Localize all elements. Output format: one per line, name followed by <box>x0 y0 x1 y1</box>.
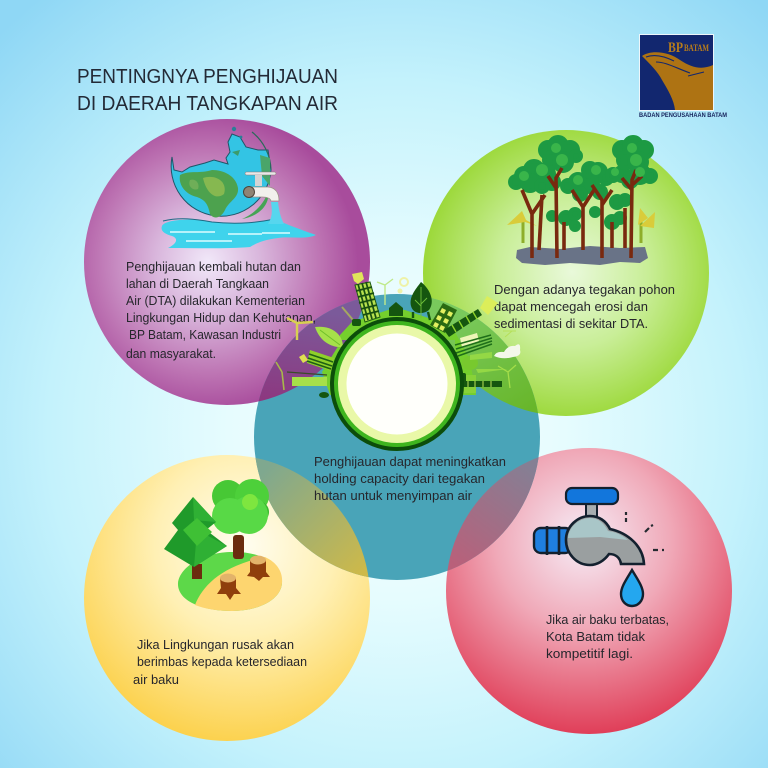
ring <box>332 319 462 449</box>
panel: red circle <box>446 448 732 734</box>
text: yellow panel: air baku <box>133 672 179 687</box>
text: yellow panel: Jika Lingkungan rusak akan <box>137 637 294 652</box>
logo: BP Batam: BADAN PENGUSAHAAN BATAM <box>639 112 727 119</box>
title <box>77 66 338 115</box>
panel: central teal circle <box>254 294 540 580</box>
pine tree <box>192 564 202 579</box>
text: teal panel: Penghijauan dapat meningkatkan <box>314 454 506 469</box>
logo: BP Batam: BATAM <box>684 43 709 53</box>
text: red panel: Jika air baku terbatas, <box>546 612 669 627</box>
yellow flag <box>352 272 364 284</box>
text: teal panel: holding capacity dari tegakan <box>314 471 485 486</box>
handle <box>566 488 618 504</box>
panel: yellow circle <box>84 455 370 741</box>
small pale turbine <box>377 279 393 305</box>
stumps <box>217 578 241 600</box>
crescent line <box>252 132 271 170</box>
text: red panel <box>546 612 669 661</box>
small twig <box>503 331 516 337</box>
trunks <box>522 168 642 258</box>
drop <box>621 570 643 606</box>
panel: green circle <box>423 130 709 416</box>
pale sun <box>400 278 408 286</box>
lime skyline backing <box>322 310 476 395</box>
text: red panel: Kota Batam tidak <box>546 629 645 644</box>
yellow square <box>299 354 308 363</box>
text: green panel: dapat mencegah erosi dan <box>494 299 648 314</box>
leaf right <box>462 356 478 370</box>
cloud <box>494 344 520 358</box>
faucet <box>245 172 276 175</box>
text: purple panel: Air (DTA) dilakukan Kementerian <box>126 293 305 308</box>
text: purple panel: dan masyarakat. <box>126 346 216 361</box>
tower left <box>355 282 380 322</box>
bar left <box>292 377 327 386</box>
title: PENTINGNYA PENGHIJAUAN <box>77 66 338 88</box>
striped lines right <box>455 335 492 356</box>
body <box>566 516 644 565</box>
icon: leaking faucet <box>534 488 664 606</box>
cream block <box>460 333 479 347</box>
text: purple panel: Penghijauan kembali hutan dan <box>126 259 301 274</box>
text: green panel <box>494 282 675 331</box>
island <box>178 552 282 611</box>
striped tower right <box>444 309 482 337</box>
text: green panel: Dengan adanya tegakan pohon <box>494 282 675 297</box>
crowns <box>510 137 656 230</box>
panel: purple circle <box>84 119 370 405</box>
text: purple panel: lahan di Daerah Tangkaan <box>126 276 269 291</box>
text: yellow panel <box>133 637 307 687</box>
striped block left <box>307 350 334 371</box>
text: teal panel <box>314 454 506 503</box>
text: red panel: kompetitif lagi. <box>546 646 633 661</box>
text: purple panel: BP Batam, Kawasan Industri <box>129 327 281 342</box>
lime bars right <box>470 352 508 373</box>
hose <box>534 528 572 553</box>
falling water <box>268 202 284 224</box>
continents <box>180 170 238 217</box>
icon: eco city ring <box>276 272 520 449</box>
text: purple panel: Lingkungan Hidup dan Kehutanan, <box>126 310 316 325</box>
splash drops <box>232 127 236 131</box>
logo: BP Batam <box>639 34 727 119</box>
text: purple panel <box>126 259 316 361</box>
icon: globe with faucet and water <box>162 127 316 248</box>
house <box>389 302 403 316</box>
globe body <box>171 134 271 216</box>
text: green panel: sedimentasi di sekitar DTA. <box>494 316 648 331</box>
round tree <box>233 535 244 559</box>
splashes <box>626 512 664 550</box>
logo: BP Batam: BP <box>668 40 683 56</box>
title: DI DAERAH TANGKAPAN AIR <box>77 93 338 115</box>
ground <box>516 246 648 265</box>
small cars <box>352 319 361 326</box>
yellow diamond <box>480 296 498 315</box>
icon: forest trees <box>507 137 656 265</box>
text: teal panel: hutan untuk menyimpan air <box>314 488 473 503</box>
yellow building right <box>430 303 457 333</box>
wind turbines <box>287 318 313 340</box>
striped bar right <box>462 381 502 387</box>
icon: trees and stumps <box>164 479 282 611</box>
left leaf <box>315 327 343 347</box>
banana plants <box>523 218 641 243</box>
water pool <box>162 219 316 248</box>
crown highlights <box>519 143 645 185</box>
leaf tree <box>411 282 432 313</box>
stem <box>586 503 597 519</box>
text: yellow panel: berimbas kepada ketersediaan <box>137 654 307 669</box>
